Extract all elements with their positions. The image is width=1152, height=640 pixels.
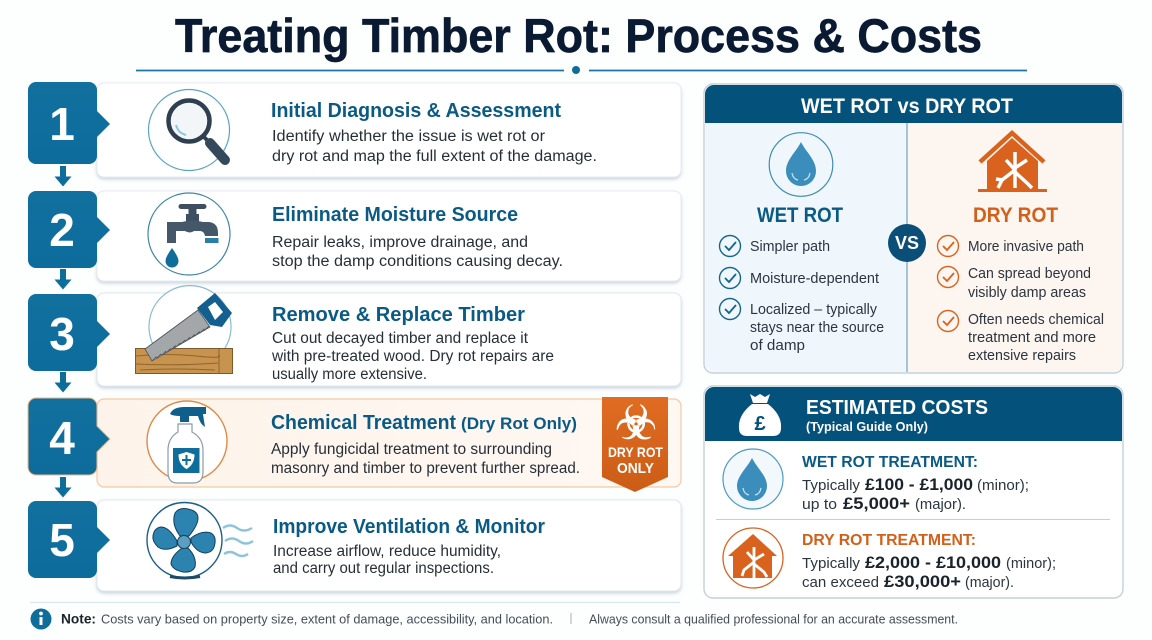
note <box>61 612 958 626</box>
vs badge <box>888 224 926 262</box>
step 3 text: usually more extensive. <box>272 366 427 383</box>
title: Treating Timber Rot: Process & Costs <box>175 9 982 62</box>
step 3 heading: Remove & Replace Timber <box>272 304 525 326</box>
note: Always consult a qualified professional for an accurate assessment. <box>589 612 958 626</box>
step 2 card <box>97 191 681 281</box>
step 4 number tab: 4 <box>49 412 75 464</box>
comparison header <box>705 85 1122 123</box>
panel: wet rot vs dry rot <box>704 84 1123 373</box>
icon: saw on timber <box>136 286 232 374</box>
step 3 text: Cut out decayed timber and replace it <box>272 330 529 347</box>
step 1 heading: Initial Diagnosis & Assessment <box>271 100 561 122</box>
icon: house with dry rot <box>978 133 1047 190</box>
wet rot cost text: (major). <box>915 497 966 513</box>
step 1 text: Identify whether the issue is wet rot or <box>272 128 545 145</box>
step 3 text: with pre-treated wood. Dry rot repairs are <box>271 348 554 365</box>
icon: info <box>30 608 52 630</box>
comparison header: WET ROT vs DRY ROT <box>801 95 1013 118</box>
wet rot cost text <box>802 476 1029 513</box>
dry rot cost <box>723 528 1056 591</box>
step 2 text: stop the damp conditions causing decay. <box>272 253 563 270</box>
step 2 <box>28 191 681 281</box>
title rule <box>136 66 1027 74</box>
icon: magnifying glass <box>148 90 230 170</box>
dry rot list: visibly damp areas <box>968 285 1086 301</box>
step 1 number tab: 1 <box>49 98 75 150</box>
costs header: ESTIMATED COSTS <box>806 397 988 419</box>
icon: ventilation fan <box>147 502 253 578</box>
step 1 text <box>272 128 597 165</box>
wet rot heading: WET ROT <box>757 204 843 227</box>
step 2 text: Repair leaks, improve drainage, and <box>272 234 528 251</box>
wet rot list: of damp <box>750 338 805 354</box>
wet rot column background <box>705 123 907 372</box>
costs header: (Typical Guide Only) <box>806 420 928 434</box>
step 4 heading <box>271 412 577 434</box>
vs badge: VS <box>895 233 919 253</box>
dry rot list: extensive repairs <box>968 348 1076 364</box>
step 2 heading: Eliminate Moisture Source <box>272 204 518 226</box>
arrow 1 to 2 <box>54 166 72 186</box>
icon: spray bottle <box>147 401 227 483</box>
step 5 heading: Improve Ventilation & Monitor <box>273 516 545 538</box>
step 5 number tab: 5 <box>49 514 75 566</box>
dry rot cost text: Typically <box>802 556 861 572</box>
step 5 text <box>273 543 501 577</box>
step 4 text: Apply fungicidal treatment to surrounding <box>271 441 552 458</box>
step 1 <box>28 82 681 177</box>
dry rot cost text: £2,000 - £10,000 <box>865 554 1001 572</box>
step 4 text <box>271 441 580 477</box>
note: Note: <box>61 612 96 626</box>
step 4 card <box>97 399 681 487</box>
badge: dry rot only: ONLY <box>617 461 654 477</box>
icon: dry rot house <box>723 528 783 588</box>
dry rot heading: DRY ROT <box>973 204 1058 227</box>
wet rot list: Simpler path <box>750 239 830 255</box>
step 4 heading: (Dry Rot Only) <box>461 414 577 433</box>
icon: water drop <box>769 133 833 196</box>
note: Costs vary based on property size, extent of damage, accessibility, and location. <box>101 612 553 626</box>
wet rot cost <box>723 449 1029 513</box>
panel: estimated costs <box>704 386 1123 598</box>
dry rot cost text: (major). <box>965 575 1014 591</box>
step 3 card <box>97 293 681 386</box>
icon: money bag <box>739 394 781 436</box>
wet rot list: stays near the source <box>750 320 884 336</box>
badge: dry rot only: ☣ <box>615 396 657 451</box>
step 4 text: masonry and timber to prevent further spread. <box>271 460 580 477</box>
step 3 number tab: 3 <box>49 308 75 360</box>
wet rot cost text: (minor); <box>977 478 1029 494</box>
wet rot cost text: Typically <box>802 478 861 494</box>
step 3 number tab <box>28 294 110 371</box>
step 1 text: dry rot and map the full extent of the damage. <box>272 148 597 165</box>
dry rot cost text: (minor); <box>1006 556 1056 572</box>
step 5 card <box>97 500 681 591</box>
step 3 text <box>271 330 554 383</box>
wet rot cost text: £100 - £1,000 <box>865 476 973 494</box>
arrow 4 to 5 <box>54 477 72 498</box>
step 1 card <box>97 83 681 177</box>
dry rot list: Often needs chemical <box>968 312 1104 328</box>
step 5 text: and carry out regular inspections. <box>273 560 494 577</box>
badge: dry rot only: DRY ROT <box>608 444 663 460</box>
icon: dripping tap <box>148 193 230 275</box>
dry rot cost text: can exceed <box>802 575 879 591</box>
step 4 number tab <box>28 398 110 475</box>
dry rot list: treatment and more <box>968 330 1096 346</box>
badge: dry rot only <box>602 396 668 492</box>
dry rot list <box>938 236 1104 364</box>
wet rot cost heading: WET ROT TREATMENT: <box>802 454 978 471</box>
wet rot cost text: £5,000+ <box>843 495 910 513</box>
step 5 number tab <box>28 501 110 578</box>
dry rot cost heading: DRY ROT TREATMENT: <box>802 532 976 549</box>
step 2 text <box>272 234 563 270</box>
dry rot cost text <box>802 554 1056 591</box>
icon: money bag: £ <box>754 413 766 435</box>
step 2 number tab <box>28 191 110 268</box>
step 5 text: Increase airflow, reduce humidity, <box>273 543 501 560</box>
step 2 number tab: 2 <box>49 204 75 256</box>
arrow 3 to 4 <box>54 372 72 392</box>
wet rot cost text: up to <box>802 497 837 513</box>
step 4 heading: Chemical Treatment <box>271 412 456 434</box>
step 3 <box>28 286 681 386</box>
dry rot column background <box>907 123 1122 372</box>
wet rot list: Moisture-dependent <box>750 271 879 287</box>
step 1 number tab <box>28 82 110 164</box>
wet rot list: Localized – typically <box>750 302 878 318</box>
dry rot list: More invasive path <box>968 239 1084 255</box>
costs header <box>705 387 1122 441</box>
step 5 <box>28 500 681 591</box>
wet rot list <box>720 236 884 354</box>
arrow 2 to 3 <box>54 269 72 290</box>
icon: wet rot drop <box>723 449 783 509</box>
dry rot cost text: £30,000+ <box>884 573 961 591</box>
step 4 <box>28 396 681 492</box>
dry rot list: Can spread beyond <box>968 266 1091 282</box>
